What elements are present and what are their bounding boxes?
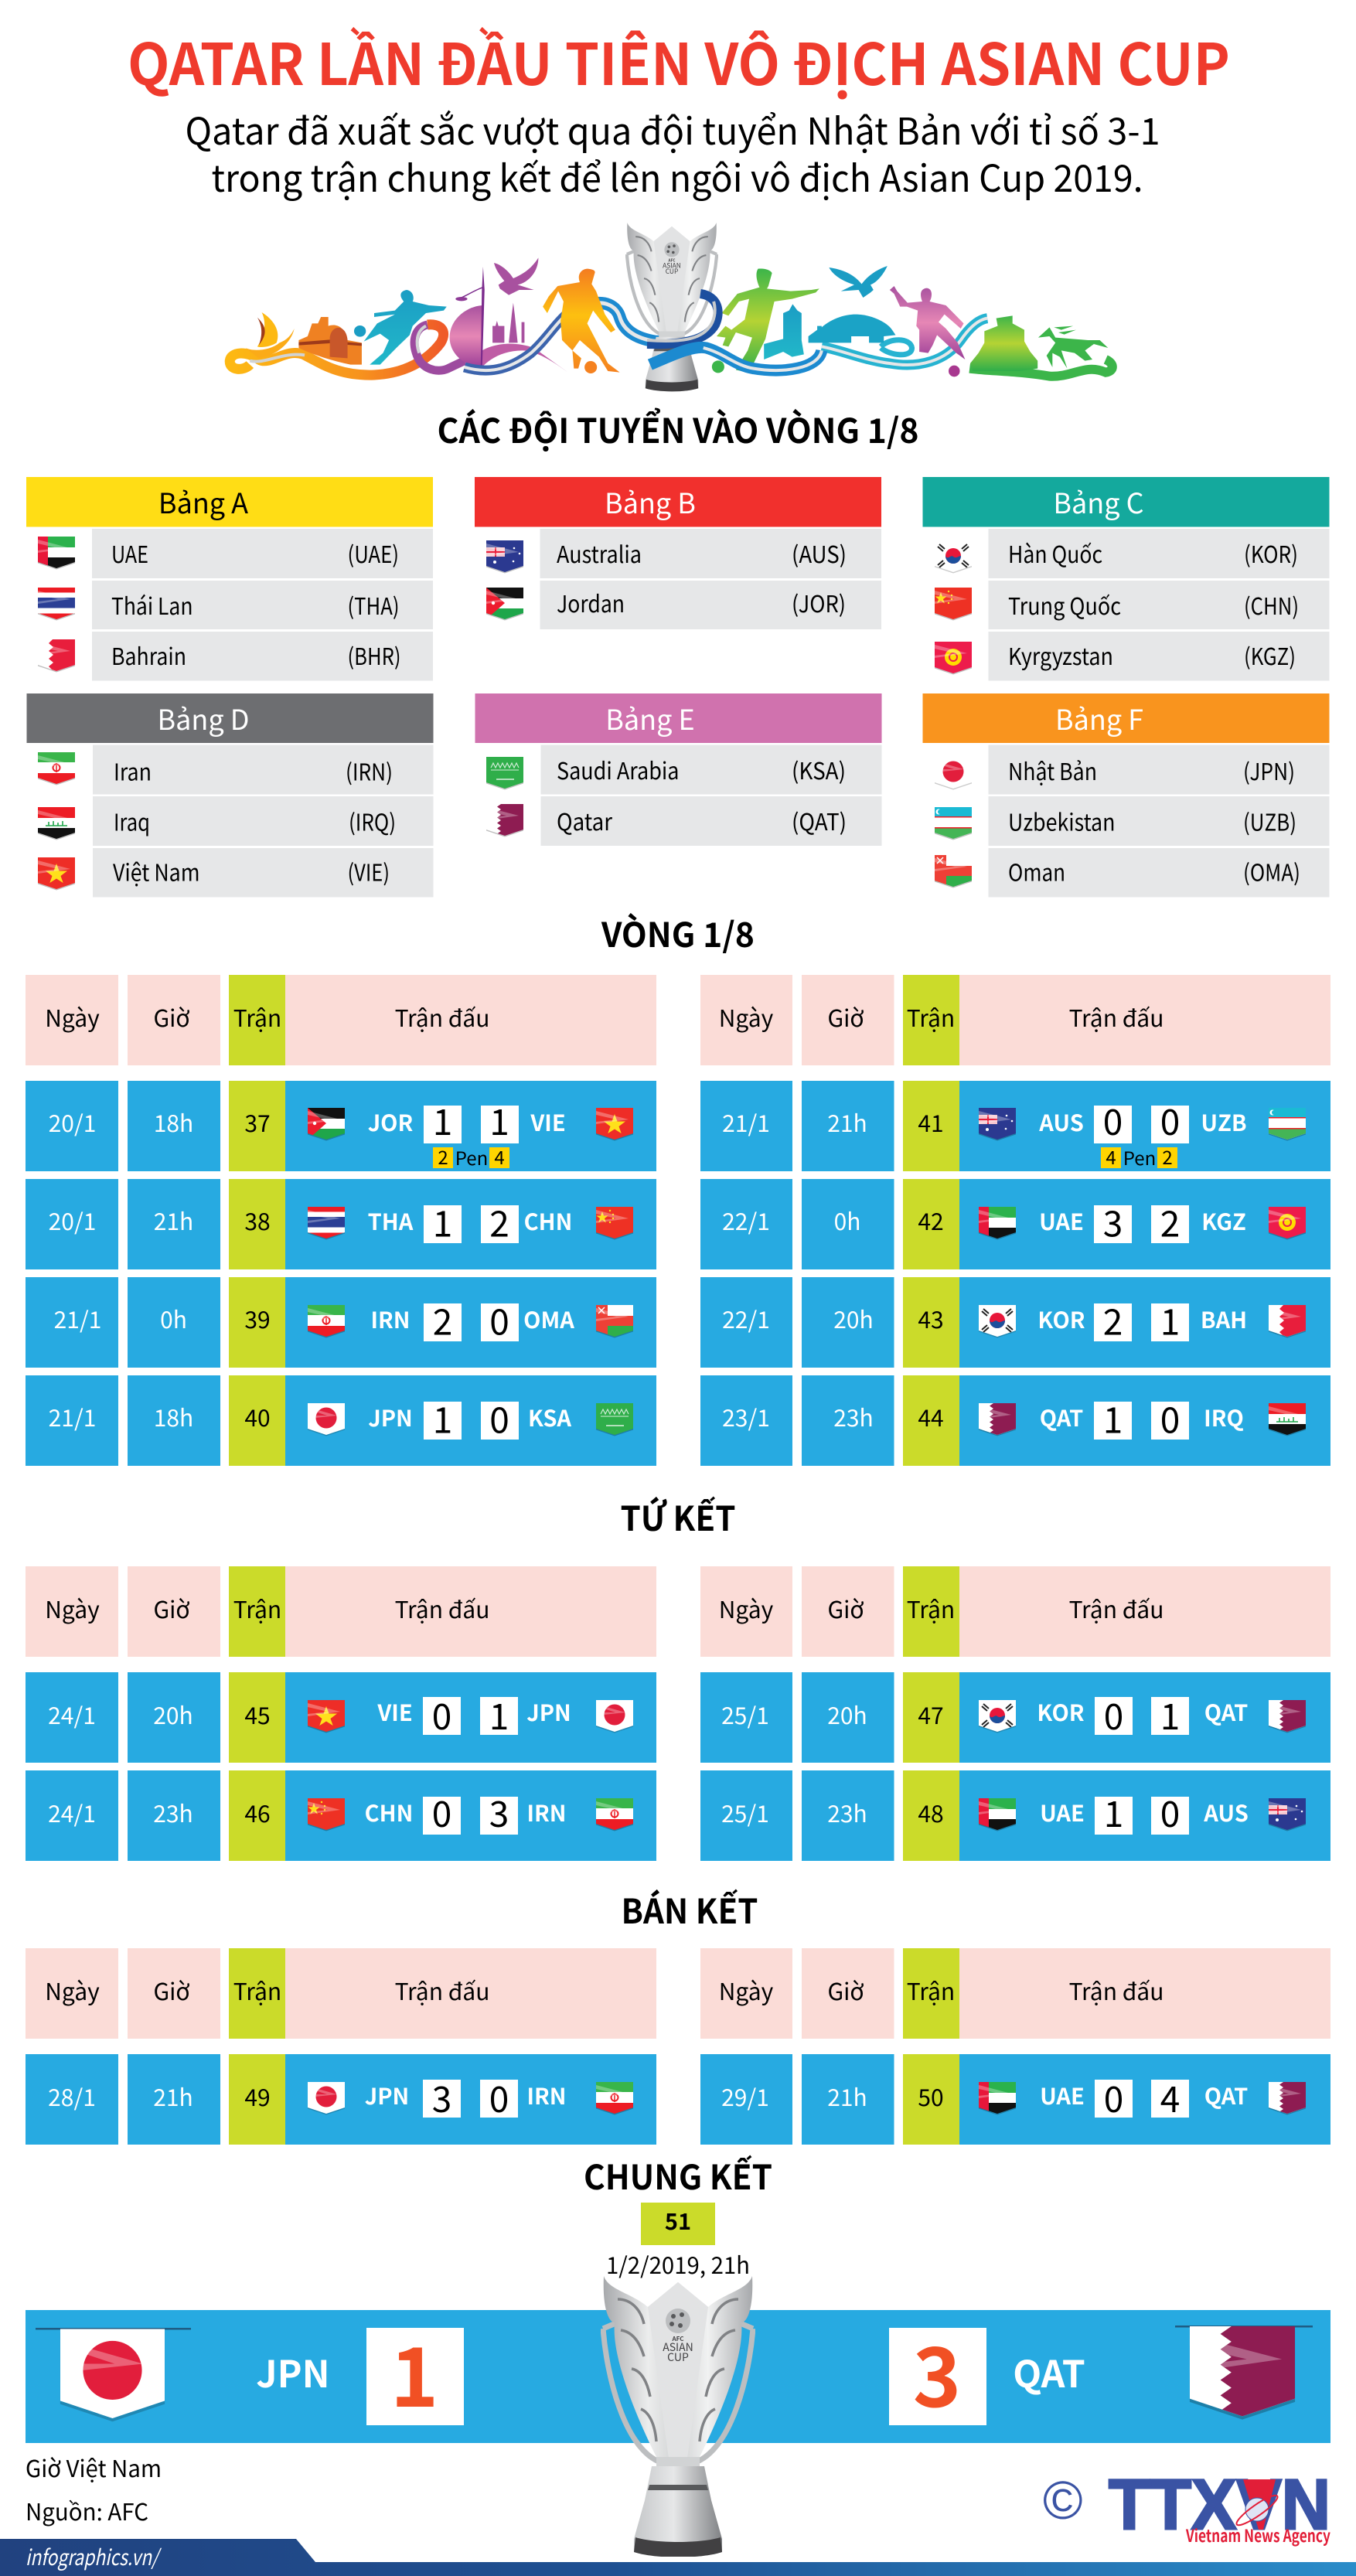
flag: Iraq <box>38 807 75 840</box>
notes: Giờ Việt Nam <box>26 2450 162 2484</box>
score 1-0: 0 <box>489 1393 509 1444</box>
table header left semi-finals: Trận đấu <box>395 1973 489 2007</box>
score 0-1 <box>423 1689 518 1740</box>
score 1-1 with penalties 2-4 <box>424 1095 519 1170</box>
team names group B <box>557 536 847 619</box>
match 47: 20h <box>827 1697 867 1731</box>
score 1-1 with penalties 2-4: 1 <box>433 1095 452 1146</box>
team names group F: Nhật Bản <box>1008 753 1097 787</box>
score 1-0: 1 <box>1104 1787 1123 1838</box>
match 44: 23/1 <box>722 1399 770 1433</box>
match 43: 20h <box>833 1301 874 1335</box>
panel: group E: Bảng E <box>605 698 695 738</box>
match 42: KGZ <box>1201 1205 1246 1237</box>
team names group B: (AUS) <box>792 536 847 570</box>
match 47: 25/1 <box>721 1697 769 1731</box>
icon: small trophy <box>627 223 717 391</box>
match 48: 25/1 <box>721 1795 769 1829</box>
table header left semi-finals <box>26 1948 656 2039</box>
flag: South Korea <box>979 1700 1016 1733</box>
match 45: JPN <box>526 1695 571 1728</box>
match 44 <box>700 1375 1330 1466</box>
score 0-0 with penalties 4-2: 4 <box>1106 1143 1116 1170</box>
team names group A: UAE <box>111 536 148 570</box>
match 45: 45 <box>244 1697 271 1731</box>
table header right quarter-finals: Giờ <box>827 1591 864 1625</box>
flag: Oman <box>596 1305 633 1337</box>
score 1-0: 1 <box>433 1393 452 1444</box>
score 0-3: 3 <box>489 1787 509 1838</box>
team names group C: (CHN) <box>1244 588 1299 622</box>
match 41: AUS <box>1038 1106 1084 1138</box>
table header right semi-finals: Giờ <box>827 1973 864 2007</box>
team names group A: Bahrain <box>111 638 186 672</box>
match 50: 50 <box>918 2079 944 2113</box>
score 1-2: 1 <box>433 1197 452 1248</box>
match 43 <box>700 1277 1330 1368</box>
score Japan: 1 <box>390 2312 438 2431</box>
match 40: 18h <box>154 1399 193 1433</box>
flag: Australia <box>979 1108 1016 1141</box>
match 38: 20/1 <box>49 1203 96 1237</box>
subtitle <box>186 101 1160 203</box>
flag: Iran <box>596 2082 633 2115</box>
score Qatar <box>889 2312 986 2431</box>
score 0-0 with penalties 4-2 <box>1094 1095 1189 1170</box>
team names group B: Jordan <box>557 585 625 619</box>
score 1-0: 0 <box>1160 1393 1180 1444</box>
score 3-0: 0 <box>489 2072 509 2123</box>
flag: Japan large <box>36 2328 191 2421</box>
match 45: 24/1 <box>48 1697 96 1731</box>
match 42: 0h <box>834 1203 860 1237</box>
table header right round of 16: Ngày <box>719 1000 774 1034</box>
match 49 <box>26 2054 656 2145</box>
team names group C: (KOR) <box>1244 536 1298 570</box>
flag: Jordan <box>308 1108 345 1141</box>
match 41: 21/1 <box>722 1105 770 1139</box>
match 47 <box>700 1672 1330 1763</box>
flag: Japan <box>308 2082 345 2115</box>
table header right semi-finals: Trận <box>907 1973 955 2007</box>
flag: Bahrain <box>38 639 75 673</box>
match 41: 41 <box>918 1105 944 1139</box>
match 46: IRN <box>526 1796 567 1828</box>
match 49: 49 <box>244 2079 271 2113</box>
team names group A: (THA) <box>348 588 399 622</box>
label QAT: QAT <box>1013 2344 1085 2398</box>
flag: Vietnam <box>596 1108 633 1141</box>
match 44: 44 <box>918 1399 944 1433</box>
flag: Oman <box>935 855 972 888</box>
panel: group E <box>475 693 881 846</box>
flag: Thailand <box>308 1207 345 1240</box>
team names group F: (JPN) <box>1243 753 1295 787</box>
score 0-1 <box>1095 1689 1189 1740</box>
match 42: 22/1 <box>722 1203 770 1237</box>
score 0-3 <box>423 1787 518 1838</box>
panel: final score bar <box>26 2310 1330 2443</box>
team names group D: Việt Nam <box>113 854 199 888</box>
score 1-2: 2 <box>489 1197 509 1248</box>
score 3-2 <box>1094 1197 1189 1248</box>
flag: Uzbekistan <box>935 807 972 840</box>
match 49: JPN <box>365 2079 409 2111</box>
match 38: CHN <box>524 1205 572 1237</box>
flag: Japan <box>935 757 972 790</box>
table header left quarter-finals <box>26 1566 656 1657</box>
match 47: 47 <box>918 1697 944 1731</box>
match 46 <box>26 1770 656 1861</box>
match 38 <box>26 1179 656 1269</box>
score 0-1: 0 <box>432 1689 451 1740</box>
team names group D: (VIE) <box>348 854 390 888</box>
flag: Vietnam <box>308 1700 345 1733</box>
flag: Saudi Arabia <box>596 1403 633 1436</box>
team names group D: Iraq <box>114 804 150 838</box>
team names group E: Qatar <box>557 803 612 837</box>
score 1-1 with penalties 2-4: 2 <box>438 1143 448 1170</box>
match 48: 23h <box>827 1795 867 1829</box>
flag: UAE <box>979 1798 1016 1831</box>
match 37: 37 <box>244 1105 271 1139</box>
flag: UAE <box>38 537 75 569</box>
table header left round of 16: Trận đấu <box>395 1000 489 1034</box>
team names group E <box>557 752 847 837</box>
subtitle: Qatar đã xuất sắc vượt qua đội tuyển Nhật Bản với tỉ số 3-1 <box>186 101 1160 155</box>
match 50: UAE <box>1040 2079 1085 2111</box>
score 2-1 <box>1094 1294 1189 1345</box>
website: infographics.vn/ <box>26 2541 162 2572</box>
match 48: 48 <box>918 1795 944 1829</box>
score 0-1: 1 <box>489 1689 509 1740</box>
notes: Nguồn: AFC <box>26 2493 148 2527</box>
match 44: QAT <box>1040 1401 1083 1433</box>
table header right round of 16: Trận <box>907 1000 955 1034</box>
team names group B: (JOR) <box>792 585 846 619</box>
match 43: KOR <box>1037 1303 1085 1335</box>
panel: group A <box>26 477 433 680</box>
score 0-1: 1 <box>1160 1689 1180 1740</box>
match 39: OMA <box>523 1303 574 1335</box>
match 44: 23h <box>833 1399 874 1433</box>
match 46: 23h <box>153 1795 193 1829</box>
flag: UAE <box>979 2082 1016 2115</box>
score 2-1: 1 <box>1160 1294 1180 1345</box>
match 47: QAT <box>1204 1695 1248 1728</box>
score 1-0: 0 <box>1160 1787 1180 1838</box>
panel: group F: Bảng F <box>1055 698 1143 738</box>
score 1-2 <box>424 1197 519 1248</box>
match number 51: 51 <box>665 2204 691 2237</box>
score 1-0 <box>424 1393 519 1444</box>
table header left round of 16: Giờ <box>153 1000 190 1034</box>
match 39: 39 <box>244 1301 271 1335</box>
flag: Thailand <box>38 588 75 620</box>
team names group F: (UZB) <box>1243 804 1296 838</box>
flag: UAE <box>979 1207 1016 1240</box>
table header right semi-finals: Ngày <box>719 1973 774 2007</box>
score 2-1: 2 <box>1103 1294 1123 1345</box>
flag: Iran <box>308 1305 345 1337</box>
score 2-0 <box>424 1294 519 1345</box>
table header right semi-finals: Trận đấu <box>1069 1973 1164 2007</box>
team names group F: Uzbekistan <box>1008 804 1115 838</box>
flag: Qatar <box>486 804 523 837</box>
score 1-0: 1 <box>1103 1393 1123 1444</box>
table header left quarter-finals: Giờ <box>153 1591 190 1625</box>
flag: South Korea <box>935 540 972 574</box>
match 44: IRQ <box>1204 1401 1244 1433</box>
match 40: JPN <box>368 1401 413 1433</box>
match 37: 20/1 <box>49 1105 96 1139</box>
panel: group F <box>923 693 1330 897</box>
score 3-2: 2 <box>1160 1197 1180 1248</box>
match 37: JOR <box>368 1106 414 1138</box>
flag: Vietnam <box>38 857 75 891</box>
flag: Iran <box>596 1798 633 1831</box>
match 50: 21h <box>827 2079 867 2113</box>
table header right quarter-finals: Ngày <box>719 1591 774 1625</box>
match 38: 21h <box>154 1203 193 1237</box>
score 1-1 with penalties 2-4: Pen <box>455 1143 488 1170</box>
heading: qualified teams: CÁC ĐỘI TUYỂN VÀO VÒNG 1/8 <box>438 404 918 453</box>
score Japan <box>366 2312 464 2431</box>
table header left semi-finals: Trận <box>233 1973 281 2007</box>
table header left round of 16: Ngày <box>45 1000 100 1034</box>
icon: big trophy <box>603 2276 753 2557</box>
match 39 <box>26 1277 656 1368</box>
score 0-0 with penalties 4-2: 0 <box>1103 1095 1123 1146</box>
match 45: VIE <box>376 1695 413 1728</box>
panel: group B <box>475 477 881 629</box>
flag: Qatar large <box>1175 2326 1313 2420</box>
flag: Iran <box>38 752 75 785</box>
match 42: 42 <box>918 1203 944 1237</box>
flag: Uzbekistan <box>1269 1108 1306 1141</box>
match 42: UAE <box>1039 1205 1084 1237</box>
match 46: 24/1 <box>48 1795 96 1829</box>
match 40: KSA <box>528 1401 571 1433</box>
score 2-0: 0 <box>489 1294 509 1345</box>
table header left quarter-finals: Trận <box>233 1591 281 1625</box>
score 3-0: 3 <box>432 2072 451 2123</box>
flag: Qatar <box>979 1403 1016 1436</box>
match 50: QAT <box>1204 2079 1248 2111</box>
table header left round of 16: Trận <box>233 1000 281 1034</box>
table header right semi-finals <box>700 1948 1330 2039</box>
match 40: 21/1 <box>49 1399 96 1433</box>
match 45 <box>26 1672 656 1763</box>
match 46: CHN <box>365 1796 413 1828</box>
heading: round of 16: VÒNG 1/8 <box>601 908 755 957</box>
score 0-0 with penalties 4-2: 0 <box>1160 1095 1180 1146</box>
match 42 <box>700 1179 1330 1269</box>
team names group A: (BHR) <box>348 638 400 672</box>
flag: China <box>308 1798 345 1831</box>
match 39: 21/1 <box>54 1301 101 1335</box>
match 49: 21h <box>153 2079 193 2113</box>
table header right round of 16: Trận đấu <box>1069 1000 1164 1034</box>
flag: Iraq <box>1269 1403 1306 1436</box>
match 49: 28/1 <box>48 2079 96 2113</box>
panel: group D: Bảng D <box>157 698 250 738</box>
flag: Kyrgyzstan <box>1269 1207 1306 1240</box>
table header left semi-finals: Giờ <box>153 1973 190 2007</box>
score 0-0 with penalties 4-2: 2 <box>1162 1143 1173 1170</box>
table header left quarter-finals: Trận đấu <box>395 1591 489 1625</box>
score 0-1: 0 <box>1104 1689 1123 1740</box>
match 43: 43 <box>918 1301 944 1335</box>
score 1-1 with penalties 2-4: 4 <box>494 1143 505 1170</box>
table header right quarter-finals: Trận đấu <box>1069 1591 1164 1625</box>
match 37: VIE <box>530 1106 566 1138</box>
match 46: 46 <box>244 1795 271 1829</box>
heading: final: CHUNG KẾT <box>584 2150 772 2199</box>
match 37: 18h <box>154 1105 193 1139</box>
score 3-0 <box>423 2072 518 2123</box>
match 37 <box>26 1081 656 1171</box>
match 43: BAH <box>1201 1303 1247 1335</box>
team names group C <box>1008 536 1299 672</box>
team names group C: Trung Quốc <box>1008 588 1121 622</box>
logo: TTXVN Vietnam News Agency: TTXVN <box>1109 2465 1330 2544</box>
team names group C: Hàn Quốc <box>1008 536 1102 570</box>
team names group C: (KGZ) <box>1244 638 1296 672</box>
flag: Saudi Arabia <box>486 757 523 790</box>
score 2-0: 2 <box>433 1294 452 1345</box>
score 0-4: 4 <box>1160 2072 1180 2123</box>
team names group A: Thái Lan <box>111 588 193 622</box>
match 48 <box>700 1770 1330 1861</box>
match 48: UAE <box>1040 1796 1085 1828</box>
table header left round of 16 <box>26 975 656 1065</box>
title: QATAR LẦN ĐẦU TIÊN VÔ ĐỊCH ASIAN CUP <box>128 19 1230 102</box>
match 41: UZB <box>1201 1106 1247 1138</box>
team names group F: (OMA) <box>1243 854 1300 888</box>
panel: group C: Bảng C <box>1053 482 1144 522</box>
heading: semi-finals: BÁN KẾT <box>622 1884 758 1934</box>
table header right quarter-finals <box>700 1566 1330 1657</box>
score 0-4 <box>1095 2072 1189 2123</box>
score 0-0 with penalties 4-2: Pen <box>1123 1143 1156 1170</box>
team names group D: Iran <box>114 753 152 787</box>
flag: Kyrgyzstan <box>935 642 972 674</box>
table header right quarter-finals: Trận <box>907 1591 955 1625</box>
flag: Bahrain <box>1269 1305 1306 1337</box>
match 39: 0h <box>160 1301 187 1335</box>
match 50 <box>700 2054 1330 2145</box>
notes <box>26 2450 162 2527</box>
table header left quarter-finals: Ngày <box>45 1591 100 1625</box>
match 43: 22/1 <box>722 1301 770 1335</box>
flag: Qatar <box>1269 1700 1306 1733</box>
team names group D: (IRN) <box>346 753 393 787</box>
flag: Japan <box>596 1700 633 1733</box>
match 41 <box>700 1081 1330 1171</box>
label JPN: JPN <box>256 2344 330 2398</box>
table header right round of 16 <box>700 975 1330 1065</box>
flag: Jordan <box>486 588 523 620</box>
flag: Qatar <box>1269 2082 1306 2115</box>
panel: group C <box>923 477 1330 680</box>
score 1-0 <box>1095 1787 1189 1838</box>
match 50: 29/1 <box>721 2079 769 2113</box>
score 0-3: 0 <box>432 1787 451 1838</box>
team names group A <box>111 536 400 672</box>
flag: Japan <box>308 1403 345 1436</box>
final date and time: 1/2/2019, 21h <box>606 2247 750 2281</box>
team names group D: (IRQ) <box>349 804 396 838</box>
panel: group D <box>26 693 433 897</box>
team names group C: Kyrgyzstan <box>1008 638 1113 672</box>
footer band <box>0 2539 1356 2576</box>
flag: China <box>596 1207 633 1240</box>
match 41: 21h <box>827 1105 867 1139</box>
team names group A: (UAE) <box>348 536 399 570</box>
match 40: 40 <box>244 1399 271 1433</box>
match 45: 20h <box>153 1697 193 1731</box>
team names group B: Australia <box>557 536 642 570</box>
team names group E: (QAT) <box>792 803 847 837</box>
team names group E: Saudi Arabia <box>557 752 679 786</box>
team names group D <box>113 753 396 888</box>
score 1-1 with penalties 2-4: 1 <box>489 1095 509 1146</box>
match 47: KOR <box>1037 1695 1085 1728</box>
match 38: THA <box>368 1205 414 1237</box>
subtitle: trong trận chung kết để lên ngôi vô địch Asian Cup 2019. <box>212 148 1143 203</box>
match 40 <box>26 1375 656 1466</box>
score Qatar: 3 <box>913 2312 961 2431</box>
score 3-2: 3 <box>1103 1197 1123 1248</box>
flag: Australia <box>1269 1798 1306 1831</box>
team names group F: Oman <box>1008 854 1065 888</box>
score 0-4: 0 <box>1104 2072 1123 2123</box>
team names group E: (KSA) <box>792 752 846 786</box>
flag: China <box>935 588 972 620</box>
flag: Australia <box>486 540 523 574</box>
match 48: AUS <box>1203 1796 1249 1828</box>
match number 51 <box>641 2203 715 2245</box>
match 38: 38 <box>244 1203 271 1237</box>
team names group F <box>1008 753 1300 888</box>
heading: quarter-finals: TỨ KẾT <box>620 1491 736 1541</box>
panel: group A: Bảng A <box>158 482 248 522</box>
score 1-0 <box>1094 1393 1189 1444</box>
banner illustration: players, landmarks, ribbons and trophy <box>230 223 1112 391</box>
panel: group B: Bảng B <box>605 482 696 522</box>
match 49: IRN <box>526 2079 567 2111</box>
copyright symbol: © <box>1043 2470 1083 2530</box>
table header right round of 16: Giờ <box>827 1000 864 1034</box>
match 39: IRN <box>370 1303 411 1335</box>
table header left semi-finals: Ngày <box>45 1973 100 2007</box>
flag: South Korea <box>979 1305 1016 1337</box>
